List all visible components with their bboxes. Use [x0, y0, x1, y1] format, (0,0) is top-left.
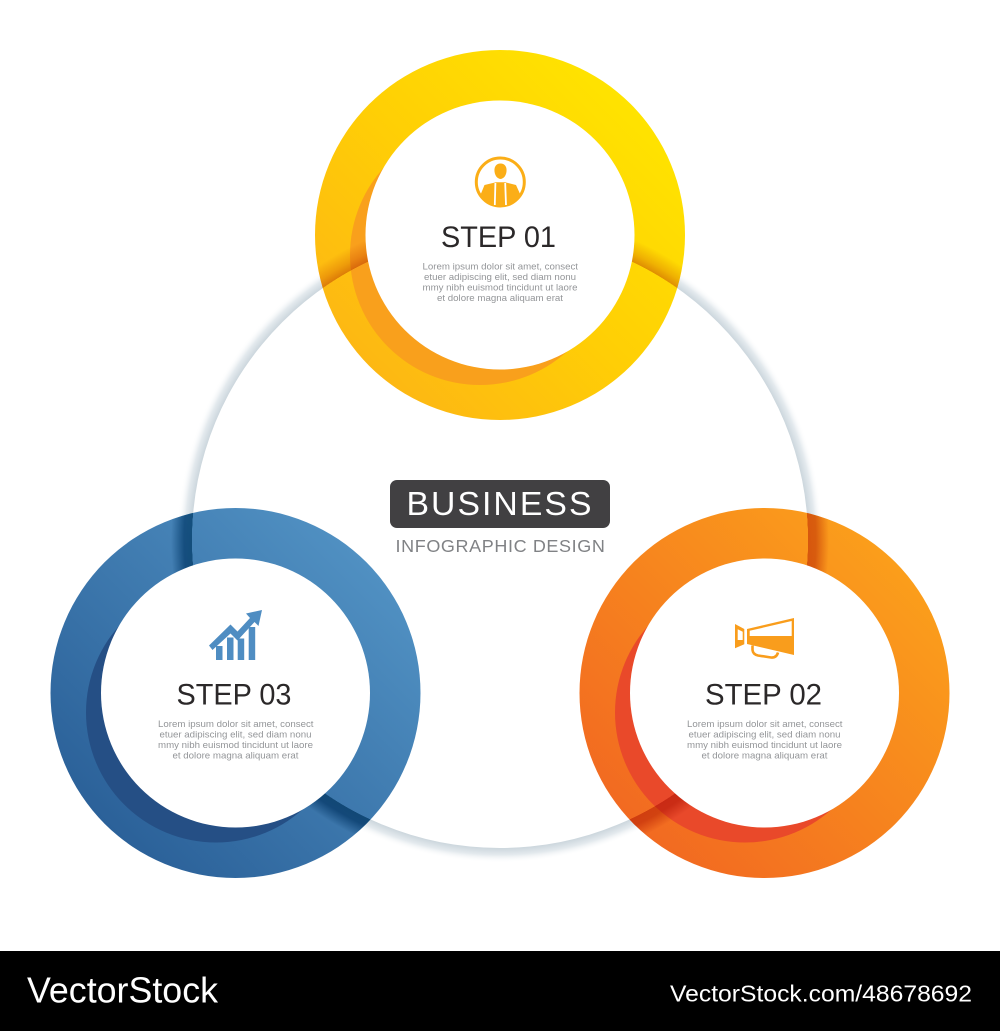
text block: step 03 description: Lorem ipsum dolor sit amet, consect [158, 719, 314, 729]
text block: step 01 description [422, 262, 578, 303]
text block: step 03 description [158, 719, 314, 760]
text block: step 02 description: Lorem ipsum dolor sit amet, consect [687, 719, 843, 729]
subtitle: infographic design: INFOGRAPHIC DESIGN [396, 536, 606, 556]
footer bar: watermark: VectorStock.com/48678692 [670, 981, 972, 1007]
footer bar: watermark: VectorStock [27, 970, 219, 1010]
icon: businessman [476, 158, 524, 206]
heading: step 01: STEP 01 [441, 221, 556, 254]
text block: step 01 description: mmy nibh euismod tincidunt ut laore [422, 282, 578, 292]
heading: step 03: STEP 03 [176, 678, 292, 712]
heading: step 02: STEP 02 [705, 678, 822, 712]
text block: step 02 description: et dolore magna aliquam erat [702, 750, 828, 760]
central title badge: BUSINESS [390, 480, 610, 528]
text block: step 03 description: mmy nibh euismod tincidunt ut laore [158, 740, 313, 750]
text block: step 03 description: etuer adipiscing elit, sed diam nonu [160, 730, 312, 740]
text block: step 02 description: mmy nibh euismod tincidunt ut laore [687, 740, 842, 750]
central title badge: BUSINESS: BUSINESS [406, 485, 594, 522]
footer bar: watermark [0, 951, 1000, 1031]
icon: rising bar chart [209, 610, 262, 660]
panel: step 03 blue ring [50, 508, 420, 878]
panel: step 02 orange ring [580, 508, 950, 878]
text block: step 02 description [687, 719, 843, 760]
text block: step 01 description: et dolore magna aliquam erat [437, 293, 563, 303]
icon: megaphone [735, 618, 794, 658]
text block: step 01 description: Lorem ipsum dolor sit amet, consect [422, 262, 578, 272]
panel: large central circle with soft shadow [177, 217, 823, 863]
text block: step 01 description: etuer adipiscing elit, sed diam nonu [424, 272, 576, 282]
text block: step 03 description: et dolore magna aliquam erat [172, 750, 299, 760]
text block: step 02 description: etuer adipiscing elit, sed diam nonu [688, 730, 840, 740]
panel: step 01 yellow ring [315, 50, 685, 420]
